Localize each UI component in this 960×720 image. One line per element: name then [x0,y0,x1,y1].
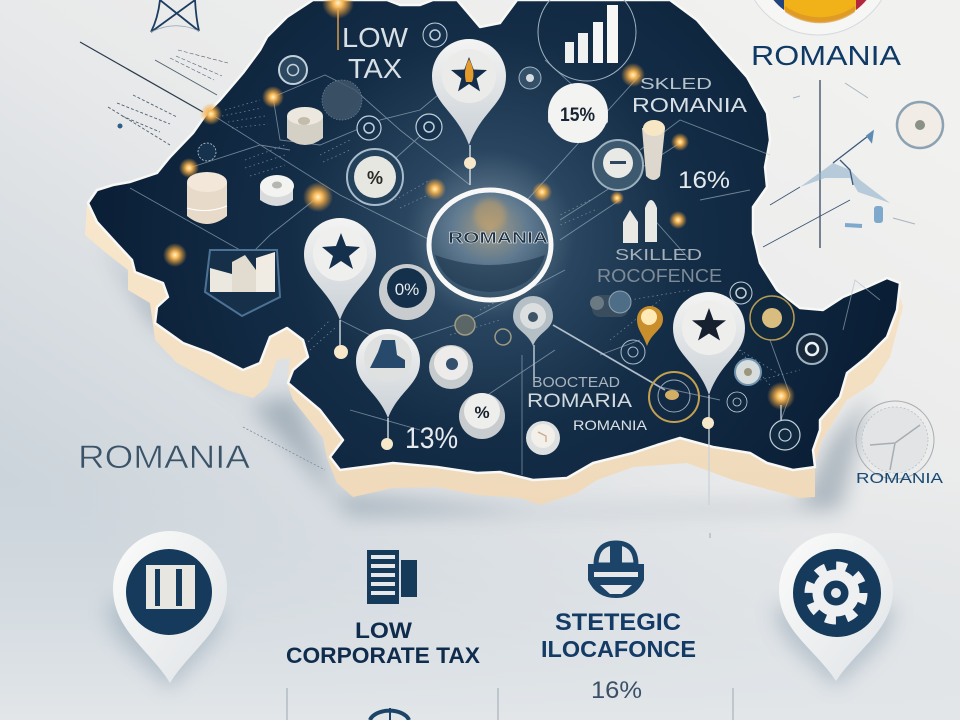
map top surface [88,0,900,480]
bottom pin: gear [775,533,895,688]
pin: lower left factory [356,329,420,450]
disc with heart [429,345,473,389]
emblem bottom right: ROMANIA [856,470,943,487]
disc with symbol: % [474,403,490,422]
map labels: BOOCTEAD ROMARIA ROMANIA: BOOCTEAD [532,374,620,391]
white disc lower centre [526,421,560,455]
white pill 15%: 15% [560,105,595,126]
network lines on map [130,60,880,475]
heading: ROMANIA top right: ROMANIA [751,40,901,71]
value 16% on map: 16% [678,167,730,194]
icon: office building [367,550,417,604]
ring near pin [621,340,645,364]
orange network nodes [163,0,795,410]
large central glow [405,150,575,320]
icon: hard hat [588,543,644,598]
disc 0%: 0% [395,280,419,299]
map label: SKLED ROMANIA: ROMANIA [632,95,748,117]
label: LOW CORPORATE TAX: CORPORATE TAX [286,643,480,668]
tall cylinder [642,120,665,180]
icon: cropped dome bottom [370,708,409,720]
text label ROMANIA left: ROMANIA [78,439,251,475]
pin: gold [637,306,663,346]
bottom pin: columns [108,531,227,690]
map label: SKLED ROMANIA [632,76,748,117]
column dividers [287,533,733,720]
map label: SKLED ROMANIA: SKLED [640,76,712,93]
pin: small translucent [513,296,553,380]
dotted mesh disc [322,80,362,120]
columns icon [146,565,195,609]
pin: right star [673,292,745,505]
label: LOW CORPORATE TAX: LOW [355,618,412,643]
bottom item: strategic workforce [541,543,696,704]
central ROMANIA lens: ROMANIA [448,230,549,247]
label: LOW CORPORATE TAX [286,618,480,668]
map of Romania [85,0,903,505]
white puck [260,175,294,206]
white pill 15% [548,83,608,143]
map label: LOW TAX: LOW [342,22,409,53]
gear icon [809,566,863,620]
pin: left star [304,218,376,359]
badge disc with symbol [347,149,403,205]
map label: LOW TAX [342,22,409,84]
gold ring target [649,372,699,422]
disc with symbol [459,393,505,439]
map shadow [100,240,870,515]
right side rings [727,282,827,450]
label: STETEGIC ILOCAFONCE: ILOCAFONCE [541,636,696,662]
bottom item: low corporate tax [286,550,480,668]
central ROMANIA lens [429,190,551,300]
faint data texture on map [222,100,800,385]
small ring near bars [519,67,541,89]
small rings upper left of map [198,23,447,161]
sketch dashed line lower left [243,427,325,470]
disc 0% [379,264,435,320]
stacked disc [593,140,643,190]
emblem bottom right [856,401,943,487]
small cylinder upper [287,107,323,145]
map labels: BOOCTEAD ROMARIA ROMANIA [527,374,648,433]
label: STETEGIC ILOCAFONCE: STETEGIC [555,609,681,636]
map label: SKILLED ROCOFENCE [597,247,722,286]
value: 16%: 16% [591,677,642,704]
factory icon hexagon [205,250,280,316]
map labels: BOOCTEAD ROMARIA ROMANIA: ROMARIA [527,391,632,412]
dark bubble pair [590,291,631,317]
decorative sketch: survey lines top left [80,42,228,145]
label: STETEGIC ILOCAFONCE [541,609,696,662]
beige cylinder [187,172,227,224]
map label: LOW TAX: TAX [348,53,402,84]
map label: SKILLED ROCOFENCE: SKILLED [615,247,702,264]
map extruded edge [85,200,903,505]
decorative ring top right [897,102,943,148]
national flag badge [743,0,893,35]
decorative sketch: transmission tower [151,0,199,32]
pillars [623,200,657,243]
pin: top star [432,39,506,185]
decorative sketch: glass compass right [763,80,915,248]
value 13%: 13% [405,422,458,455]
bar chart badge [538,0,636,81]
small gold rings centre [455,315,511,345]
badge disc with symbol: % [367,168,383,188]
map label: SKILLED ROCOFENCE: ROCOFENCE [597,266,722,286]
map labels: BOOCTEAD ROMARIA ROMANIA: ROMANIA [573,417,648,433]
